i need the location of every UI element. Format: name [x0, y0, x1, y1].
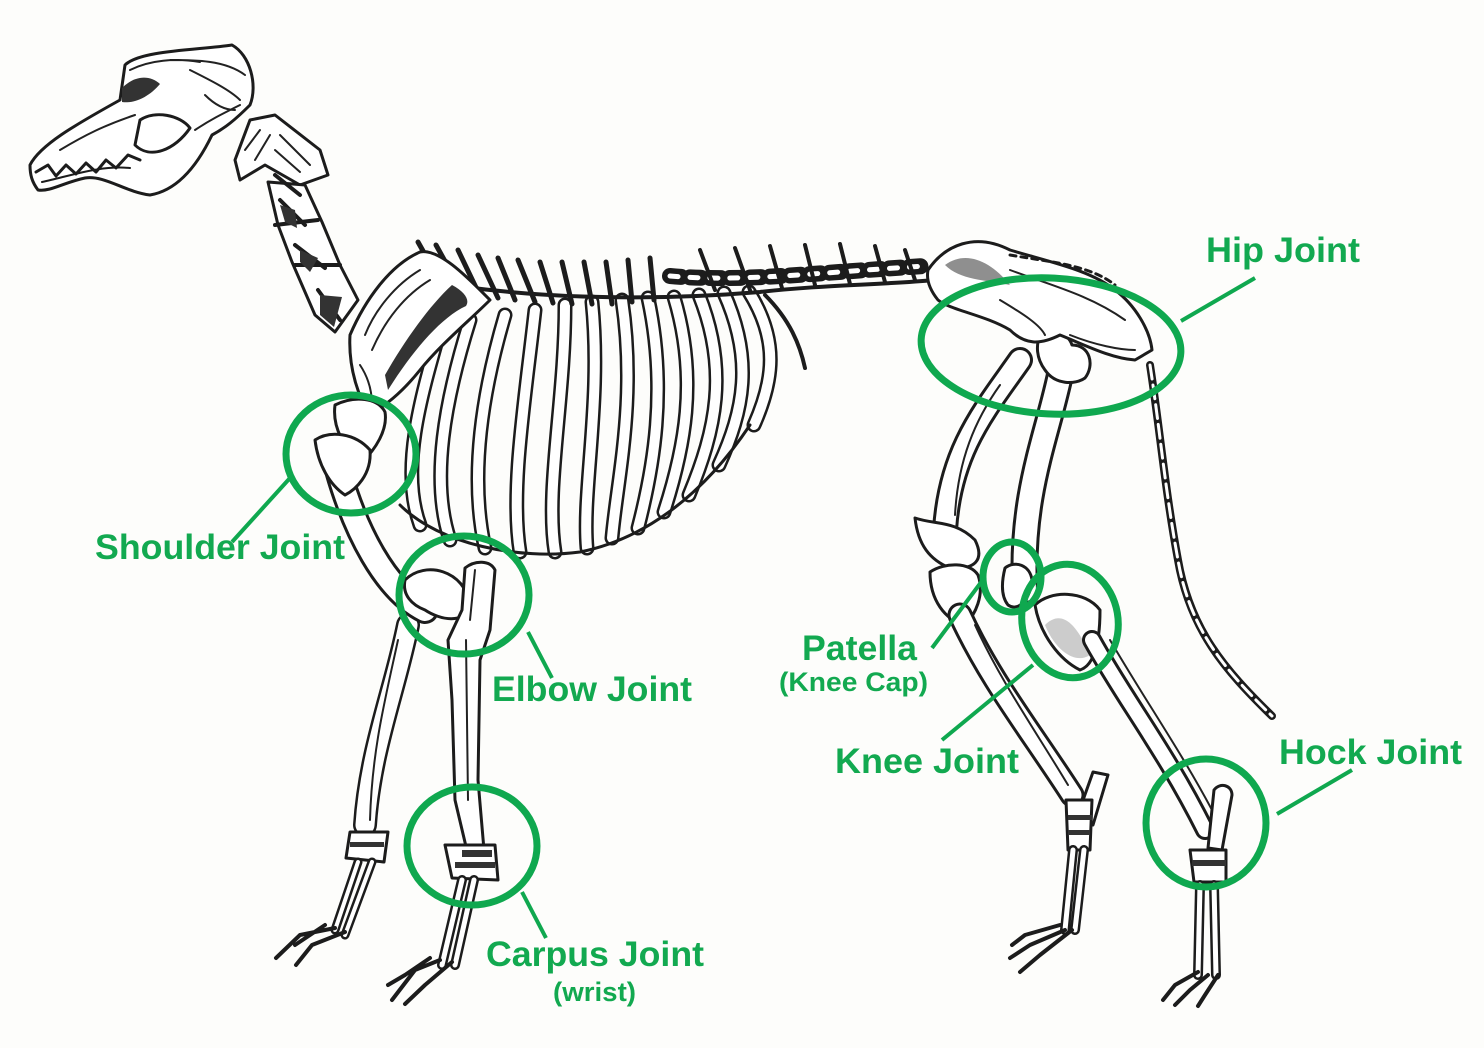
scapula — [350, 252, 490, 415]
near hind leg — [1002, 332, 1232, 1006]
femur — [1024, 365, 1062, 590]
shoulder joint ring — [286, 395, 416, 513]
skull — [30, 45, 253, 195]
elbow joint ring — [399, 536, 529, 654]
pelvis — [927, 242, 1152, 360]
hip leader line — [1181, 278, 1255, 321]
neck vertebrae — [235, 115, 358, 332]
knee joint ring — [1013, 557, 1127, 685]
hock leader line — [1277, 770, 1352, 814]
shoulder leader line — [232, 478, 290, 542]
carpus joint callout — [407, 787, 704, 1007]
tail — [1150, 365, 1272, 716]
far fore leg — [276, 625, 408, 965]
calcaneus — [1208, 785, 1232, 850]
near fore leg — [315, 399, 498, 1004]
patella label: Patella — [802, 629, 918, 668]
hock label: Hock Joint — [1279, 733, 1462, 772]
patella leader line — [932, 577, 985, 648]
hip joint callout — [918, 231, 1360, 421]
patella callout — [779, 542, 1041, 697]
hock joint ring — [1146, 759, 1266, 887]
knee label: Knee Joint — [835, 742, 1019, 781]
elbow label: Elbow Joint — [492, 670, 692, 709]
carpus sublabel: (wrist) — [553, 977, 636, 1007]
eye socket and cheek — [122, 78, 160, 102]
knee leader line — [942, 665, 1033, 740]
humerus — [338, 470, 425, 610]
shoulder joint callout — [95, 395, 416, 567]
hock joint callout — [1146, 733, 1462, 887]
teeth — [36, 155, 140, 176]
carpus label: Carpus Joint — [486, 935, 704, 974]
radius and ulna — [448, 562, 495, 855]
tibia — [1092, 640, 1205, 830]
shoulder label: Shoulder Joint — [95, 528, 345, 567]
hip joint ring — [918, 271, 1184, 421]
patella ring — [983, 542, 1041, 612]
patella sublabel: (Knee Cap) — [779, 667, 928, 697]
elbow leader line — [528, 632, 552, 678]
elbow joint callout — [399, 536, 692, 709]
carpus joint ring — [407, 787, 537, 905]
far hind leg — [915, 360, 1108, 972]
hip label: Hip Joint — [1206, 231, 1360, 270]
skeleton illustration — [30, 45, 1272, 1006]
knee joint callout — [835, 557, 1127, 781]
ribcage — [400, 292, 805, 554]
carpus leader line — [522, 892, 546, 938]
spine — [418, 242, 935, 304]
